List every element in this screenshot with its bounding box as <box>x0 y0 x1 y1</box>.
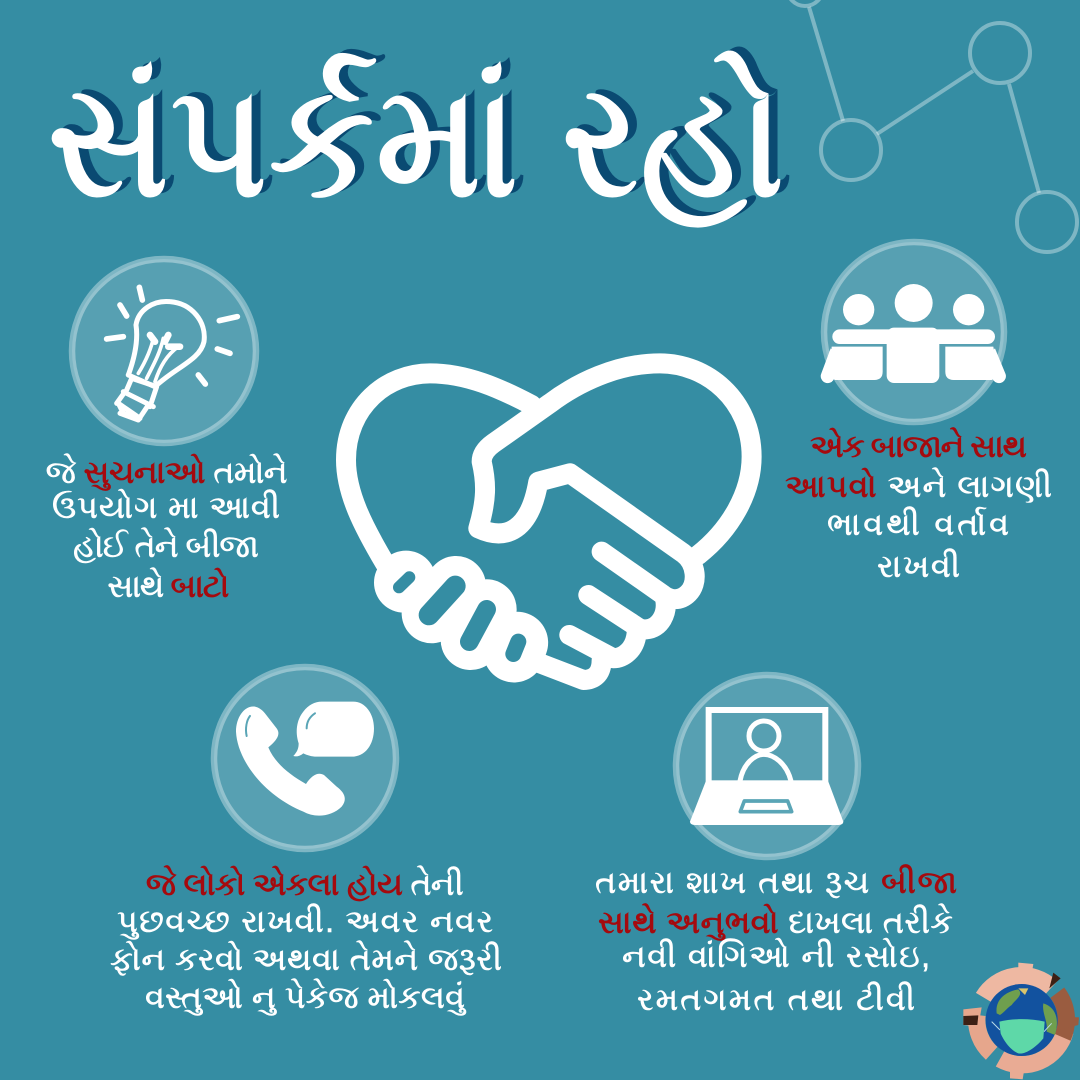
text: support each other: આપવો અને લાગણી <box>785 468 1052 504</box>
text: share information: હોઈ તેને બીજા <box>73 528 259 564</box>
icon: three people <box>821 242 1006 422</box>
text: share information: સાથે બાટો <box>107 568 229 604</box>
text: check on lonely people: વસ્તુઓ નુ પેકેજ મોકલવું <box>145 979 467 1015</box>
text: check on lonely people <box>110 866 502 1015</box>
icon: laptop with person <box>676 675 858 857</box>
text: share information <box>46 454 288 604</box>
text: share hobbies: નવી વાંગિઓ ની રસોઇ, <box>622 938 930 974</box>
icon: handshake heart <box>346 363 752 680</box>
text: share information: ઉપયોગ મા આવી <box>52 489 280 525</box>
text: check on lonely people: પુછવચ્છ રાખવી. અવર નવર <box>117 903 493 939</box>
text: share hobbies <box>595 864 957 1017</box>
text: support each other: રાખવી <box>877 548 960 584</box>
text: share hobbies: સાથે અનુભવો દાખલા તરીકે <box>598 904 953 940</box>
text: share hobbies: તમારા શાખ તથા રૂચ બીજા <box>595 864 957 900</box>
text: support each other: એક બાજાને સાથ <box>810 428 1027 464</box>
text: check on lonely people: ફોન કરવો અથવા તેમને જરૂરી <box>110 941 502 977</box>
title: સંપર્કમાં રહો <box>47 51 785 230</box>
icon: light bulb <box>72 259 256 443</box>
network decoration <box>787 0 1077 252</box>
text: share hobbies: રમતગમત તથા ટીવી <box>637 981 915 1017</box>
text: support each other <box>785 428 1052 584</box>
logo: masked globe in hands <box>963 963 1079 1079</box>
text: share information: જે સુચનાઓ તમોને <box>46 454 288 490</box>
text: support each other: ભાવથી વર્તાવ <box>827 506 1009 542</box>
icon: phone and speech bubble <box>214 667 396 849</box>
text: check on lonely people: જે લોકો એકલા હોય તેની <box>146 866 464 902</box>
